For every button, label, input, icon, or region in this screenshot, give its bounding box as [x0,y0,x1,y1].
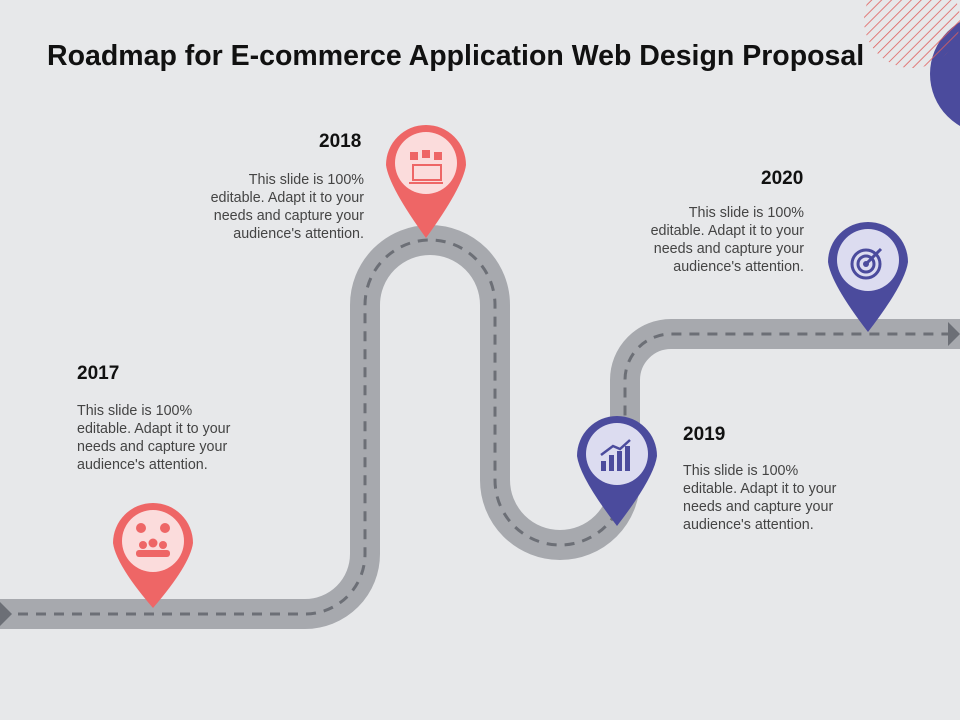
text 2019: needs and capture your [683,499,833,515]
text 2018: This slide is 100% [249,172,364,188]
text 2018: editable. Adapt it to your [211,190,364,206]
decoration: top-right circles [864,0,960,126]
text 2018 [211,172,364,242]
text 2019: audience's attention. [683,517,814,533]
text 2020 [651,205,804,275]
text 2019: editable. Adapt it to your [683,481,836,497]
text 2017: This slide is 100% [77,403,192,419]
title: Roadmap for E-commerce Application Web Design Proposal [47,40,864,72]
text 2017: audience's attention. [77,457,208,473]
text 2020: needs and capture your [654,241,804,257]
text 2017: needs and capture your [77,439,227,455]
year 2020: 2020 [761,168,803,189]
year 2017: 2017 [77,363,119,384]
text 2020: editable. Adapt it to your [651,223,804,239]
text 2017: editable. Adapt it to your [77,421,230,437]
text 2018: audience's attention. [233,226,364,242]
text 2019 [683,463,836,533]
year 2018: 2018 [319,131,361,152]
text 2017 [77,403,230,473]
text 2019: This slide is 100% [683,463,798,479]
text 2020: audience's attention. [673,259,804,275]
year 2019: 2019 [683,424,725,445]
text 2018: needs and capture your [214,208,364,224]
text 2020: This slide is 100% [689,205,804,221]
